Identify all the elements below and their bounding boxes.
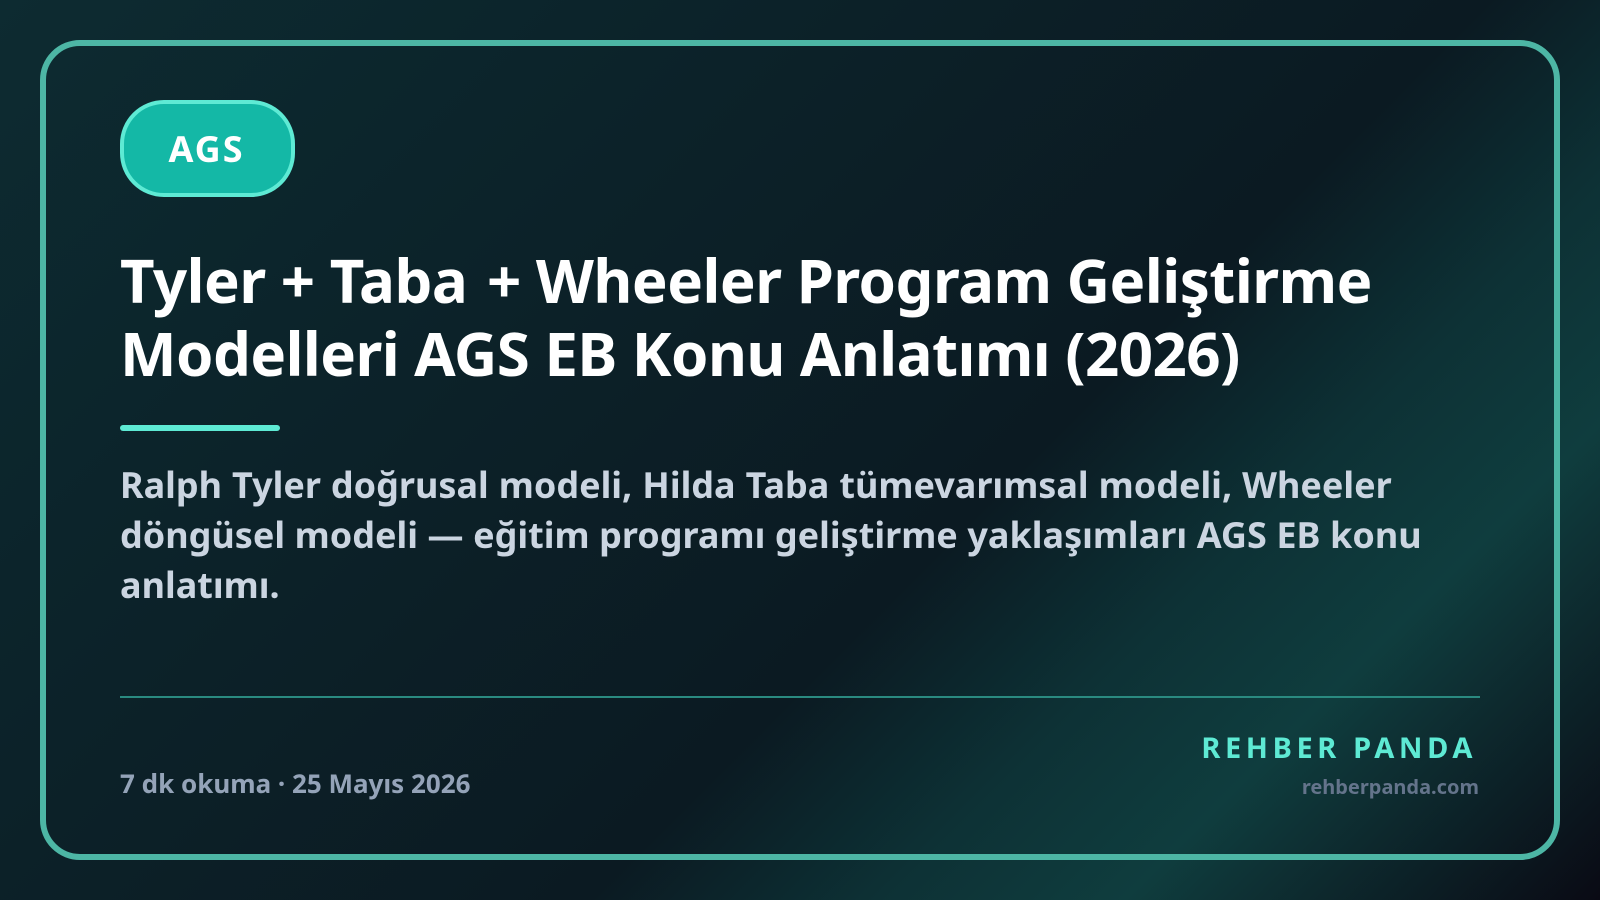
title: Tyler + Taba + Wheeler Program Geliştirme [120, 239, 1372, 321]
accent divider [120, 425, 280, 431]
description: Ralph Tyler doğrusal modeli, Hilda Taba tümevarımsal modeli, Wheeler [120, 460, 1392, 509]
website url: rehberpanda.com [1302, 773, 1479, 800]
footer rule [120, 696, 1480, 698]
badge: AGS [120, 100, 295, 197]
description: döngüsel modeli — eğitim programı geliştirme yaklaşımları AGS EB konu [120, 510, 1422, 559]
description [120, 460, 1422, 609]
description: anlatımı. [120, 560, 280, 609]
title [120, 239, 1372, 394]
title: Modelleri AGS EB Konu Anlatımı (2026) [120, 312, 1240, 394]
badge: AGS: AGS [168, 124, 245, 173]
reading time and date: 7 dk okuma · 25 Mayıs 2026 [120, 765, 470, 801]
brand name: REHBER PANDA [1201, 728, 1477, 767]
